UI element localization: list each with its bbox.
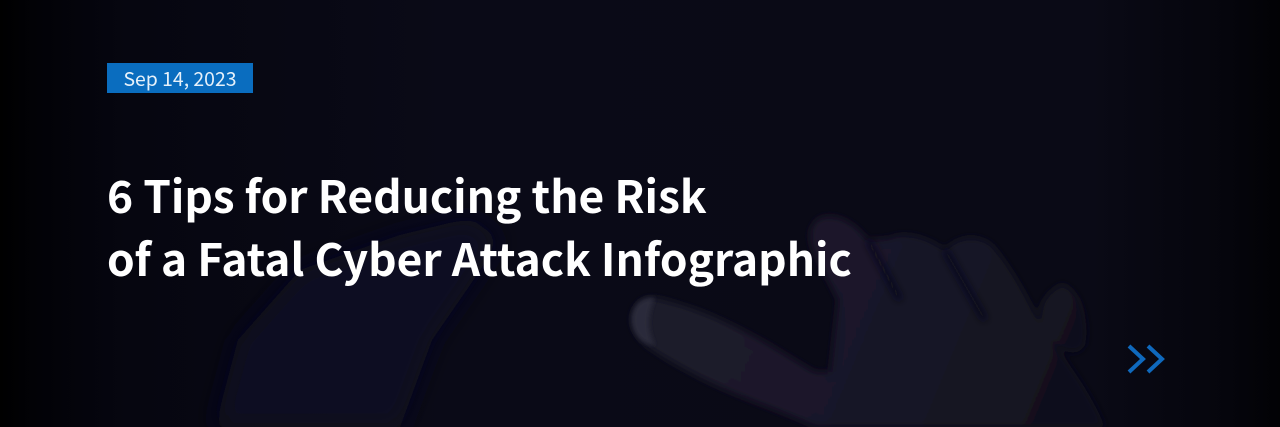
title: 6 Tips for Reducing the Risk xyxy=(107,162,707,226)
title xyxy=(107,162,852,289)
icon: double chevron arrow xyxy=(1128,344,1165,374)
date badge: Sep 14, 2023 xyxy=(124,63,236,92)
title: of a Fatal Cyber Attack Infographic xyxy=(107,225,852,289)
finger separations xyxy=(868,240,985,320)
